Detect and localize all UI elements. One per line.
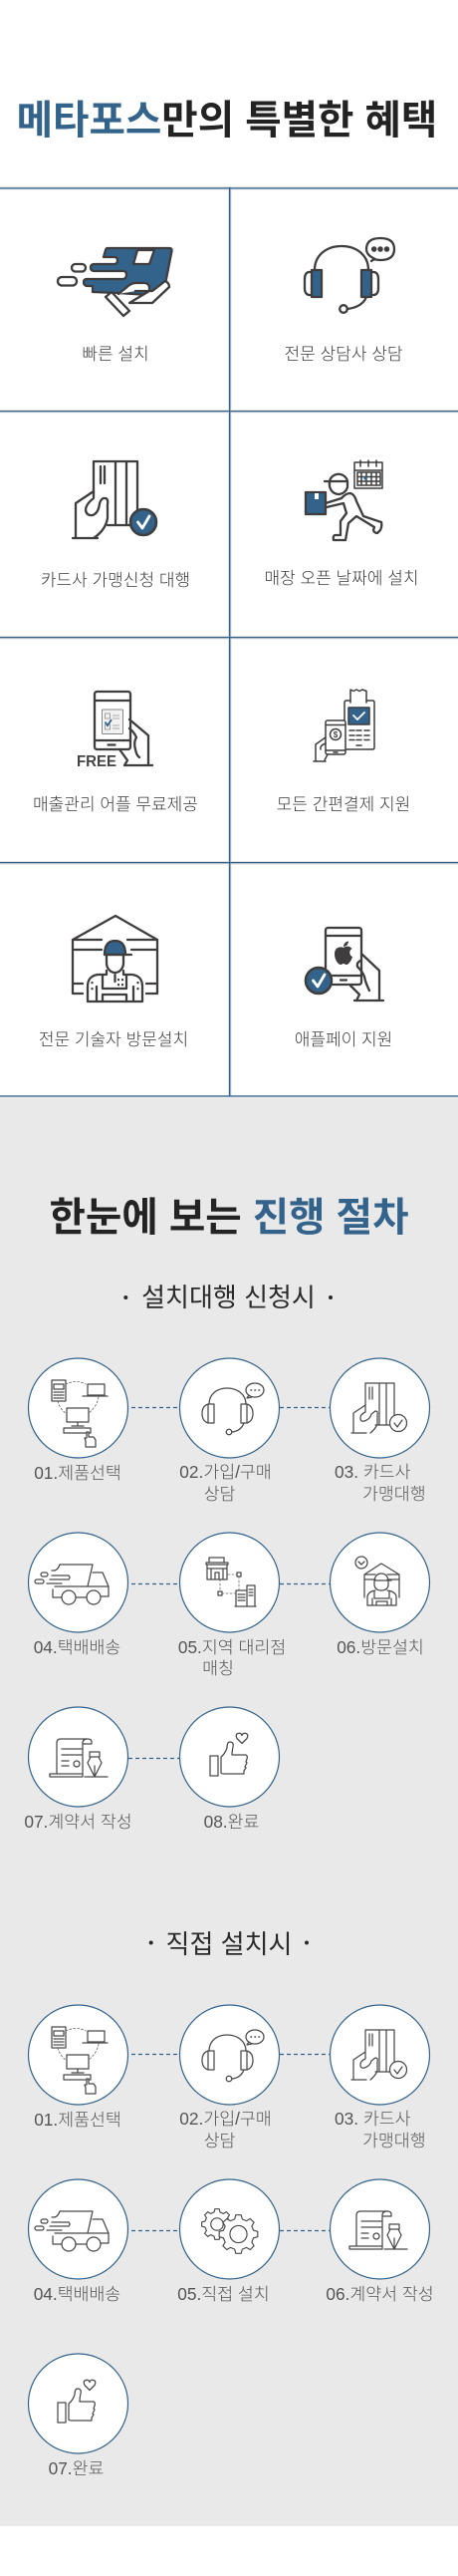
label: 02.가입/구매	[179, 1462, 272, 1482]
icon: technician with clock	[355, 1557, 399, 1605]
connectors: agent flow	[128, 1407, 330, 1758]
icon: headset	[202, 1383, 264, 1435]
panel: fast installation	[58, 248, 172, 365]
subheading: installation agent: 설치대행 신청시	[141, 1278, 316, 1314]
panel: expert visit	[39, 916, 188, 1050]
icon: store and building	[206, 1558, 256, 1606]
direct step 07 complete	[28, 2354, 127, 2478]
label: 가맹대행	[362, 2131, 426, 2150]
connectors: direct flow	[131, 2055, 330, 2230]
icon: phone with checklist and FREE	[77, 692, 152, 770]
benefits grid lines	[0, 186, 458, 1096]
label: 빠른 설치	[82, 340, 149, 365]
icon: contract	[50, 1739, 108, 1777]
step 07 contract	[24, 1707, 132, 1832]
step 02 consultation	[179, 1358, 279, 1504]
label: 05.지역 대리점	[178, 1637, 286, 1657]
label: 전문 상담사 상담	[285, 340, 402, 365]
step 03 card registration	[331, 1358, 430, 1504]
label: 01.제품선택	[34, 2110, 121, 2130]
label: 04.택배배송	[34, 1637, 120, 1657]
icon: truck	[35, 1565, 109, 1604]
direct step 02 consultation	[179, 2005, 279, 2150]
label: 01.제품선택	[34, 1463, 121, 1483]
icon: phone with checklist and FREE: FREE	[77, 753, 116, 770]
icon: truck	[35, 2211, 109, 2251]
label: 상담	[204, 1484, 235, 1504]
label: 03. 카드사	[335, 2109, 411, 2129]
panel: apple pay	[295, 928, 392, 1050]
label: 모든 간편결제 지원	[277, 790, 410, 815]
label: 가맹대행	[362, 1484, 426, 1504]
label: 매장 오픈 날짜에 설치	[264, 564, 419, 589]
subheading: direct installation: 직접 설치시	[166, 1924, 292, 1961]
step 06 visit install	[331, 1533, 430, 1657]
step 08 complete	[179, 1707, 279, 1832]
panel: all easy payments	[277, 690, 410, 815]
step 05 dealer matching	[178, 1533, 286, 1678]
icon: card	[351, 1383, 406, 1433]
step 01 product selection	[28, 1358, 127, 1483]
label: 매출관리 어플 무료제공	[33, 790, 198, 815]
top border of process panel	[0, 1095, 458, 1097]
icon: card	[351, 2030, 406, 2080]
label: 03. 카드사	[335, 1462, 411, 1482]
icon: payment terminal and phone: $	[334, 730, 339, 739]
label: 06.계약서 작성	[326, 2284, 434, 2304]
label: 카드사 가맹신청 대행	[41, 566, 190, 591]
label: 02.가입/구매	[179, 2109, 272, 2129]
direct step 06 contract	[326, 2179, 434, 2304]
icon: phone with apple logo	[306, 928, 383, 1001]
title: 메타포스만의 특별한 혜택	[17, 89, 437, 145]
heading: process at a glance: 한눈에 보는 진행 절차	[50, 1186, 408, 1243]
label: 상담	[204, 2131, 235, 2150]
direct step 04 delivery	[28, 2179, 127, 2304]
direct step 01 product selection	[28, 2005, 127, 2130]
icon: courier with box and calendar	[306, 460, 382, 540]
label: 전문 기술자 방문설치	[39, 1025, 188, 1050]
label: 07.계약서 작성	[24, 1812, 132, 1832]
panel: card application	[41, 461, 190, 591]
label: 07.완료	[49, 2458, 104, 2478]
direct step 03 card registration	[331, 2005, 430, 2150]
icon: hand with card and check	[73, 461, 156, 538]
icon: devices	[52, 2027, 108, 2094]
icon: devices	[52, 1380, 108, 1447]
label: 05.직접 설치	[177, 2284, 270, 2304]
step 04 delivery	[28, 1533, 127, 1657]
label: 매칭	[202, 1658, 234, 1678]
panel: expert consultation	[285, 238, 402, 365]
direct step 05 self install	[177, 2179, 279, 2304]
icon: headset	[202, 2030, 264, 2082]
icon: gears	[202, 2209, 258, 2253]
panel: process background	[0, 1096, 458, 2526]
icon: headset	[305, 238, 394, 313]
label: 06.방문설치	[337, 1637, 424, 1657]
icon: thumbs up	[58, 2380, 96, 2423]
label: 애플페이 지원	[295, 1025, 392, 1050]
icon: thumbs up	[210, 1733, 248, 1776]
icon: contract	[349, 2211, 407, 2249]
panel: install on opening day	[264, 460, 419, 589]
label: 04.택배배송	[34, 2284, 120, 2304]
panel: free sales app	[33, 692, 198, 815]
label: 08.완료	[204, 1812, 259, 1832]
icon: technician and house	[73, 916, 157, 1002]
icon: delivery box in hand	[58, 248, 172, 316]
